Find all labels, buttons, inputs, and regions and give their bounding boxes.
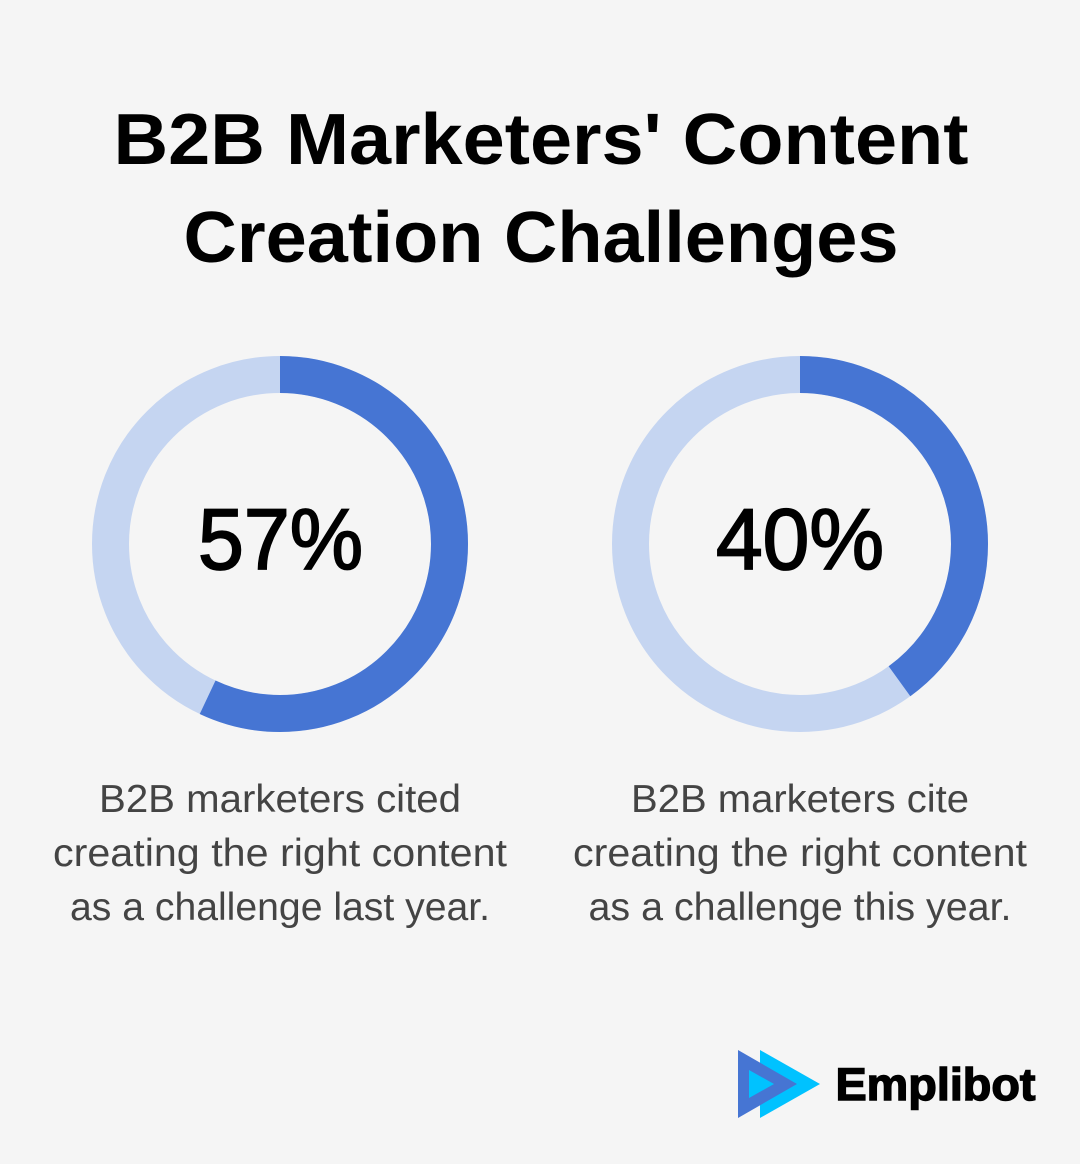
panel: this year statistic	[573, 374, 1027, 929]
wordmark: Emplibot	[836, 1059, 1036, 1110]
description: this year: creating the right content	[573, 832, 1027, 875]
title: B2B Marketers' Content	[114, 100, 969, 180]
icon: play triangles	[738, 1050, 820, 1118]
logo: Emplibot	[738, 1050, 1036, 1118]
value: 57%: 57%	[198, 492, 363, 588]
description: this year: as a challenge this year.	[588, 886, 1012, 929]
description: this year: B2B marketers cite	[631, 778, 969, 821]
description: this year	[573, 778, 1027, 929]
description: last year	[53, 778, 507, 929]
description: last year: as a challenge last year.	[70, 886, 490, 929]
description: last year: B2B marketers cited	[99, 778, 461, 821]
value: 40%: 40%	[716, 492, 884, 588]
description: last year: creating the right content	[53, 832, 507, 875]
title: Creation Challenges	[184, 198, 898, 278]
title	[114, 100, 969, 278]
donut chart: 57%	[110, 374, 450, 714]
donut chart: 40%	[630, 374, 970, 714]
panel: last year statistic	[53, 374, 507, 929]
